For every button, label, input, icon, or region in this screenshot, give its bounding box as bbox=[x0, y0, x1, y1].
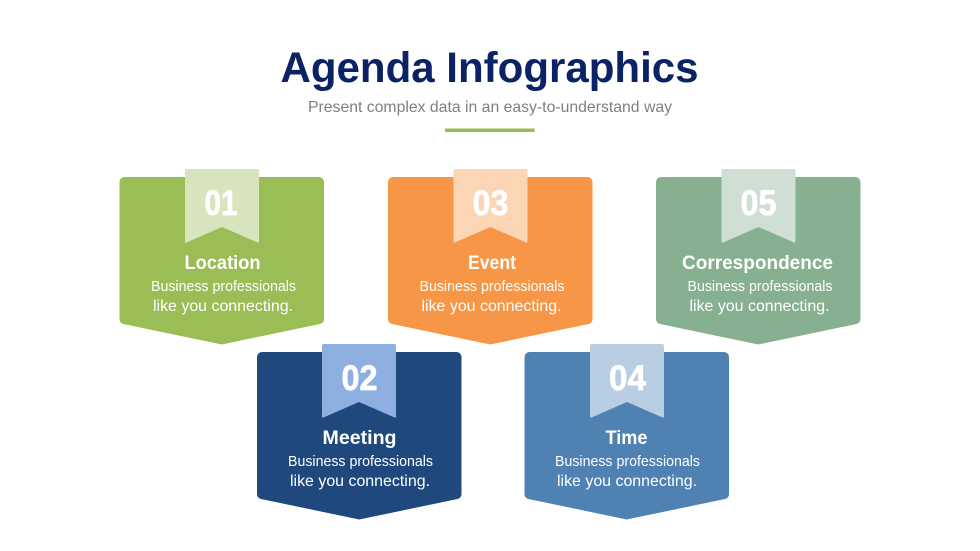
number: 02: 02 bbox=[342, 359, 378, 398]
text: Meeting description bbox=[288, 453, 433, 490]
number: 01: 01 bbox=[204, 184, 238, 223]
ribbon: 02 bbox=[322, 344, 396, 418]
text: Location description bbox=[151, 278, 296, 315]
ribbon: 01 bbox=[185, 169, 259, 243]
number: 04: 04 bbox=[609, 359, 647, 398]
title: Agenda Infographics bbox=[280, 44, 698, 92]
number: 03: 03 bbox=[472, 184, 508, 223]
panel: 03 Event bbox=[388, 169, 593, 344]
text: Event description: like you connecting. bbox=[422, 298, 562, 315]
text: Location description: Business professionals bbox=[151, 278, 296, 295]
text: Time description: like you connecting. bbox=[557, 473, 697, 490]
text: Correspondence description: like you connecting. bbox=[690, 298, 830, 315]
ribbon: 04 bbox=[590, 344, 664, 418]
text: Location description: like you connecting. bbox=[153, 298, 293, 315]
panel: 04 Time bbox=[524, 344, 729, 520]
title accent bar bbox=[445, 128, 534, 132]
text: Time description: Business professionals bbox=[555, 453, 700, 470]
text: Event description bbox=[420, 278, 564, 315]
subtitle: Present complex data in an easy-to-understand way bbox=[308, 99, 672, 116]
heading: Location: Location bbox=[184, 253, 260, 274]
text: Correspondence description bbox=[688, 278, 832, 315]
text: Correspondence description: Business professionals bbox=[688, 278, 832, 295]
panel: 01 Location bbox=[119, 169, 324, 344]
heading: Event: Event bbox=[468, 253, 517, 274]
panel: 05 Correspondence bbox=[656, 169, 861, 344]
text: Event description: Business professionals bbox=[420, 278, 564, 295]
ribbon: 05 bbox=[721, 169, 796, 243]
heading: Time: Time bbox=[606, 428, 648, 449]
heading: Meeting: Meeting bbox=[322, 428, 396, 449]
panel: 02 Meeting bbox=[257, 344, 462, 520]
heading: Correspondence: Correspondence bbox=[682, 253, 833, 274]
text: Meeting description: like you connecting. bbox=[290, 473, 430, 490]
text: Meeting description: Business professionals bbox=[288, 453, 433, 470]
number: 05: 05 bbox=[740, 184, 776, 223]
ribbon: 03 bbox=[453, 169, 528, 243]
text: Time description bbox=[555, 453, 700, 490]
